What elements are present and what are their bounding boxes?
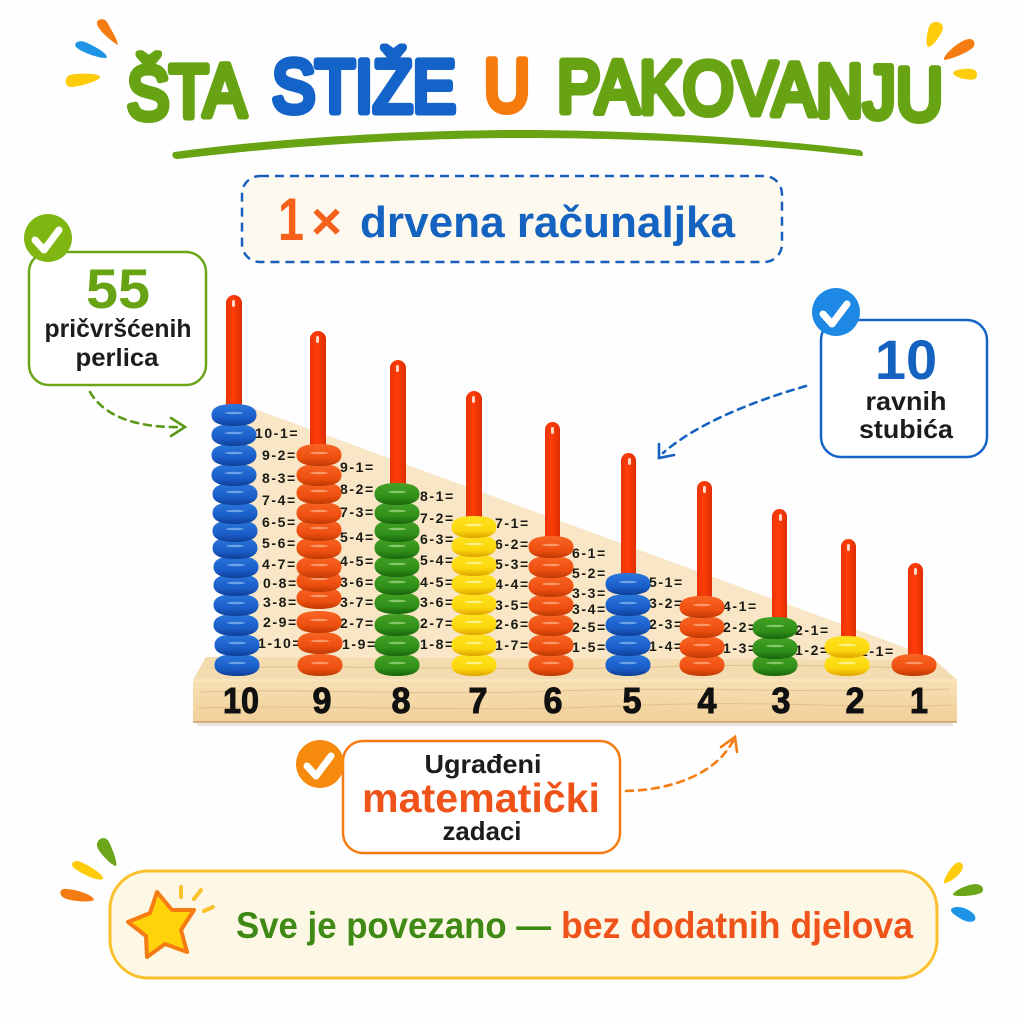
decorative sparks: title left: [66, 19, 118, 87]
subtraction problems: 8-2=: [340, 481, 375, 497]
beads: column 4 red: [680, 596, 724, 676]
beads: column 10 blue: [212, 404, 260, 676]
subtraction problems: 3-5=: [495, 597, 530, 613]
callout: built-in math problems: zadaci: [442, 816, 522, 846]
subtraction problems: 2-7=: [420, 615, 455, 631]
subtraction problems: 3-7=: [340, 594, 375, 610]
subtraction problems: 8-1=: [420, 488, 455, 504]
base numbers: 4: [698, 680, 716, 721]
beads: column 3 green: [752, 617, 798, 676]
decorative sparks: title right: [927, 22, 977, 80]
base numbers: 6: [544, 680, 562, 721]
subtraction problems: 8-3=: [262, 470, 297, 486]
subtraction problems: 3-6=: [340, 574, 375, 590]
title: ŠTA: [127, 49, 247, 135]
base numbers: 2: [846, 680, 864, 721]
beads: column 5 blue: [606, 573, 650, 676]
subtraction problems: 2-2=: [723, 619, 758, 635]
subtraction problems: 1-2=: [795, 642, 830, 658]
title: [127, 44, 943, 136]
base numbers: 10: [223, 680, 259, 721]
callout: 10 rods: 10: [875, 328, 937, 391]
abacus: [193, 295, 957, 726]
base numbers: [223, 680, 928, 721]
subtraction problems: 2-3=: [649, 616, 684, 632]
subtraction problems: 3-4=: [572, 601, 607, 617]
callout: 55 beads: perlica: [76, 344, 160, 372]
subtraction problems: 3-6=: [420, 594, 455, 610]
subtraction problems: 4-5=: [420, 574, 455, 590]
callout: built-in math problems: matematički: [362, 775, 600, 821]
beads: column 7 yellow: [452, 516, 496, 676]
panel: product count: [242, 176, 782, 262]
subtraction problems: 4-4=: [495, 576, 530, 592]
beads: column 8 green: [374, 483, 420, 676]
subtraction problems: 3-2=: [649, 595, 684, 611]
panel: product count: 1: [278, 186, 304, 253]
subtraction problems: 1-1=: [860, 643, 895, 659]
banner: everything connected: Sve je povezano —: [236, 905, 551, 946]
subtraction problems: 1-4=: [649, 638, 684, 654]
subtraction problems: 1-5=: [572, 639, 607, 655]
banner: everything connected: bez dodatnih djelova: [561, 905, 913, 946]
base numbers: 1: [910, 680, 928, 721]
rods: [226, 295, 923, 663]
subtraction problems: 7-4=: [262, 492, 297, 508]
icon: star: [128, 887, 213, 957]
rod tip highlights: [232, 300, 917, 575]
bead: column 1 red: [892, 654, 936, 676]
subtraction problems: 7-1=: [495, 515, 530, 531]
base numbers: 9: [312, 680, 332, 721]
callout: 10 rods: stubića: [859, 414, 954, 444]
subtraction problems: 6-5=: [262, 514, 297, 530]
wooden base: [193, 657, 957, 726]
arrow: beads callout to abacus: [90, 392, 185, 436]
subtraction problems: [255, 425, 895, 659]
title underline: [172, 130, 863, 159]
subtraction problems: 6-3=: [420, 531, 455, 547]
title: STIŽE: [272, 45, 456, 128]
beads: column 9 red: [296, 444, 342, 676]
subtraction problems: 2-7=: [340, 615, 375, 631]
subtraction problems: 2-5=: [572, 619, 607, 635]
subtraction problems: 5-4=: [420, 552, 455, 568]
callout: 10 rods: ravnih: [866, 386, 946, 416]
base numbers: 8: [392, 680, 410, 721]
subtraction problems: 1-3=: [723, 640, 758, 656]
subtraction problems: 4-5=: [340, 553, 375, 569]
callout: built-in math problems: [296, 740, 620, 853]
base numbers: 5: [622, 680, 642, 721]
callout: 10 rods: [812, 288, 987, 457]
subtraction problems: 6-1=: [572, 545, 607, 561]
panel: product count: ×: [311, 193, 342, 251]
subtraction problems: 2-1=: [795, 622, 830, 638]
subtraction problems: 2-6=: [495, 616, 530, 632]
subtraction problems: 1-10=: [258, 635, 302, 651]
subtraction problems: 6-2=: [495, 536, 530, 552]
callout: built-in math problems: Ugrađeni: [424, 749, 542, 779]
subtraction problems: 5-3=: [495, 556, 530, 572]
beads: column 2 yellow: [824, 636, 870, 676]
subtraction problems: 7-3=: [340, 504, 375, 520]
subtraction problems: 5-4=: [340, 529, 375, 545]
subtraction problems: 5-6=: [262, 535, 297, 551]
subtraction problems: 4-7=: [262, 556, 297, 572]
callout: 55 beads: 55: [86, 257, 150, 320]
arrow: rods callout to abacus: [659, 386, 806, 458]
callout: 55 beads: [24, 214, 206, 385]
subtraction problems: 1-7=: [495, 637, 530, 653]
subtraction problems: 7-2=: [420, 510, 455, 526]
base numbers: 7: [468, 680, 488, 721]
subtraction problems: 3-3=: [572, 585, 607, 601]
subtraction problems: 9-1=: [340, 459, 375, 475]
arrow: math callout to abacus: [626, 737, 737, 791]
subtraction problems: 1-8=: [420, 636, 455, 652]
subtraction problems: 0-8=: [263, 575, 298, 591]
subtraction problems: 9-2=: [262, 447, 297, 463]
title: U: [484, 44, 530, 127]
panel: product count: drvena računaljka: [360, 198, 736, 247]
subtraction problems: 10-1=: [255, 425, 299, 441]
subtraction problems: 4-1=: [723, 598, 758, 614]
title: PAKOVANJU: [557, 45, 943, 136]
decorative sparks: banner right: [944, 862, 983, 922]
beads: column 6 red: [528, 536, 574, 676]
abacus back panel: [225, 398, 912, 662]
subtraction problems: 5-1=: [649, 574, 684, 590]
callout: 55 beads: pričvršćenih: [44, 315, 192, 343]
banner: everything connected: [110, 871, 937, 978]
base numbers: 3: [772, 680, 790, 721]
subtraction problems: 1-9=: [342, 636, 377, 652]
subtraction problems: 3-8=: [263, 594, 298, 610]
subtraction problems: 5-2=: [572, 565, 607, 581]
decorative sparks: banner left: [60, 838, 116, 901]
subtraction problems: 2-9=: [263, 614, 298, 630]
